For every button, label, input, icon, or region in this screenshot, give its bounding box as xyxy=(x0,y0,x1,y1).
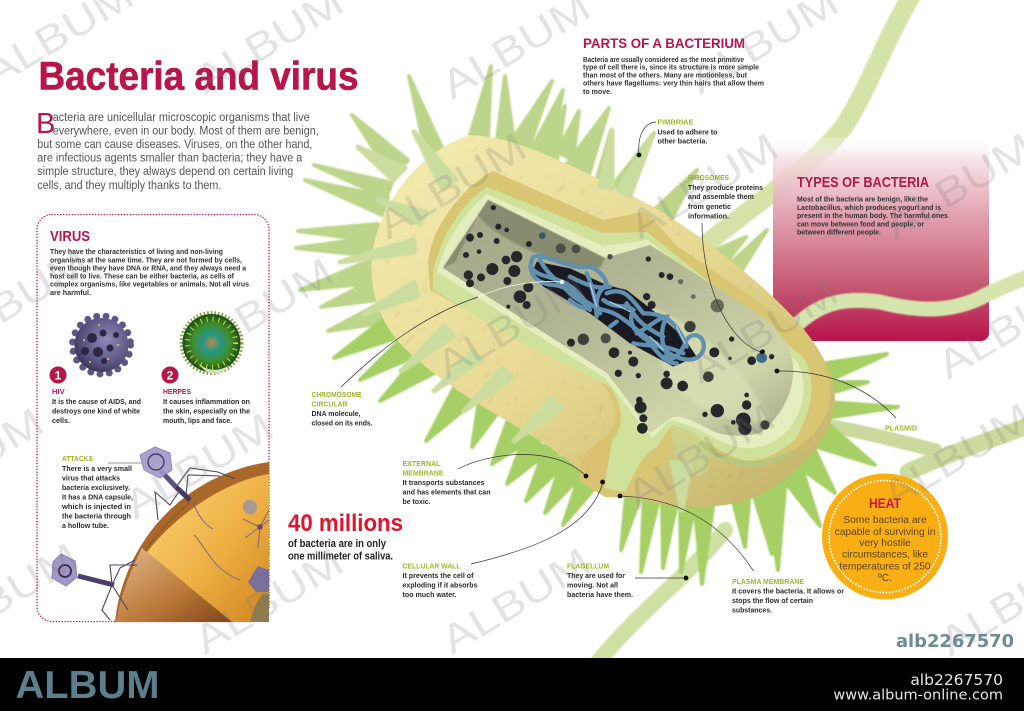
outer yellow surface xyxy=(371,135,835,507)
watermarks: ALBUM xyxy=(434,0,598,108)
text: HIV xyxy=(52,387,141,425)
fimbriae: saturated green lower spikes xyxy=(334,308,898,584)
callout: heat: capable of surviving in xyxy=(835,527,935,538)
label: external membrane: be toxic. xyxy=(402,497,430,506)
text: virus description: organisms at the same time. They are not formed by cells, xyxy=(50,256,242,264)
callout: heat: very hostile xyxy=(859,538,911,549)
label: ribosomes: information. xyxy=(688,212,729,220)
footer url: www.album-online.com xyxy=(833,688,1003,704)
label: fimbriae xyxy=(637,118,718,157)
text: herpes: the skin, especially on the xyxy=(163,406,250,416)
drop cap: B xyxy=(36,108,55,140)
sphere cut interior xyxy=(147,474,269,622)
footer logo: ALBUM xyxy=(16,664,159,707)
text: HIV: destroys one kind of white xyxy=(52,406,140,416)
text: attacks: It has a DNA capsule, xyxy=(62,492,133,502)
callout: heat: Some bacteria are xyxy=(843,515,927,526)
intro text block: are infectious agents smaller than bacteria; they have a xyxy=(37,150,302,164)
watermarks: ALBUM xyxy=(682,270,846,393)
label: fimbriae: FIMBRIAE xyxy=(658,118,694,126)
badge 1 xyxy=(50,366,66,384)
text: virus description xyxy=(50,247,249,297)
intro text block: but some can cause diseases. Viruses, on the other hand, xyxy=(37,137,312,151)
text: herpes xyxy=(163,387,250,425)
badge 2: 2 xyxy=(167,368,174,382)
label: external membrane: MEMBRANE xyxy=(402,468,444,478)
text: attacks: a hollow tube. xyxy=(62,521,109,530)
flagella: long green tails xyxy=(598,276,1024,662)
text: attacks xyxy=(61,454,133,530)
text: attacks: There is a very small xyxy=(62,464,132,473)
label: chromosome xyxy=(312,280,564,428)
label: cellular wall xyxy=(402,480,605,599)
text: virus description: even though they have DNA or RNA, and they always need a xyxy=(50,264,247,272)
cell interior xyxy=(443,200,793,436)
callout: heat xyxy=(822,474,948,600)
text: types of bacteria description: Lactobacillus, which produces yogurt and is xyxy=(797,203,941,212)
text block: parts of a bacterium: Bacteria are usually considered as the most primitive xyxy=(583,55,744,64)
footer bar xyxy=(0,658,1024,711)
callout: heat: HEAT xyxy=(869,495,901,511)
callout: 40 millions: of bacteria are in only xyxy=(288,538,387,550)
watermarks: ALBUM xyxy=(622,125,786,248)
chromosome: blue DNA tangle xyxy=(530,256,704,367)
label: chromosome: CIRCULAR xyxy=(312,400,348,408)
text: virus description: host cell to live. These can be either bacteria, as cells of xyxy=(50,272,234,280)
label: plasmid: PLASMID xyxy=(885,424,917,432)
label: cellular wall: CELLULAR WALL xyxy=(402,562,461,570)
icon: HIV virus xyxy=(72,316,130,374)
tab: cut wall end xyxy=(584,440,612,490)
panel: virus xyxy=(37,214,269,622)
label: flagellum xyxy=(567,562,688,599)
label: fimbriae: Used to adhere to xyxy=(658,128,718,136)
label: plasma membrane: It covers the bacteria. It allows or xyxy=(732,586,844,596)
text: virus description: are harmful. xyxy=(50,288,91,297)
text: herpes: It causes inflammation on xyxy=(163,397,250,406)
callout: 40 millions: one millimeter of saliva. xyxy=(288,550,393,562)
text block: parts of a bacterium: to move. xyxy=(583,87,612,96)
watermarks: ALBUM xyxy=(434,540,598,663)
callout: 40 millions: 40 millions xyxy=(288,510,403,537)
text block: parts of a bacterium xyxy=(583,35,764,96)
text: types of bacteria description: between different people. xyxy=(797,228,881,236)
label: ribosomes: They produce proteins xyxy=(688,183,763,192)
label: cellular wall: exploding if it absorbs xyxy=(402,580,478,590)
ribosome near plasmid xyxy=(757,353,767,363)
label: flagellum: bacteria have them. xyxy=(567,590,633,599)
label: external membrane: and has elements that can xyxy=(402,488,491,496)
text: attacks: bacteria exclusively. xyxy=(62,483,130,492)
cell granules xyxy=(463,205,774,435)
icon: herpes virus xyxy=(182,313,242,374)
intro text block: acteria are unicellular microscopic organisms that live xyxy=(53,110,310,124)
callout: 40 millions xyxy=(288,510,403,562)
text block: parts of a bacterium: others have flagellums: very thin hairs that allow them xyxy=(583,78,764,88)
text: virus description: complex organisms, like vegetables or animals. Not all virus xyxy=(50,280,249,288)
image code: alb2267570 xyxy=(896,631,1014,652)
text: HIV: HIV xyxy=(52,387,66,396)
callout: heat: ºC. xyxy=(878,573,892,584)
text: HIV: cells. xyxy=(52,416,70,425)
label: ribosomes xyxy=(688,173,764,354)
callout: heat: temperatures of 250 xyxy=(839,562,931,572)
label: chromosome: CHROMOSOME xyxy=(312,390,362,399)
text: herpes: HERPES xyxy=(163,387,191,396)
label: flagellum: moving. Not all xyxy=(567,580,618,590)
label: plasmid xyxy=(775,369,917,432)
text: HIV: It is the cause of AIDS, and xyxy=(52,397,141,406)
text block: parts of a bacterium: than most of the others. Many are motionless, but xyxy=(583,70,748,80)
label: ribosomes: and assemble them xyxy=(688,192,754,201)
intro text block xyxy=(36,108,319,192)
footer image id: alb2267570 xyxy=(910,671,1003,689)
badge 2 xyxy=(162,366,178,384)
text block: parts of a bacterium: type of cell there is, since its structure is more simple xyxy=(583,62,759,72)
watermarks: ALBUM xyxy=(187,540,351,663)
interior back wall xyxy=(443,200,605,268)
watermarks: ALBUM xyxy=(177,250,341,373)
bacterium body xyxy=(371,135,835,507)
label: external membrane: It transports substances xyxy=(402,478,484,487)
label: cellular wall: It prevents the cell of xyxy=(402,571,474,580)
heading: types of bacteria: TYPES OF BACTERIA xyxy=(797,174,929,191)
watermarks: ALBUM xyxy=(370,125,534,248)
watermarks: ALBUM xyxy=(117,405,281,528)
text: attacks: which is injected in xyxy=(61,502,131,511)
badge 1: 1 xyxy=(55,368,62,382)
sphere outer surface xyxy=(116,548,232,622)
label: ribosomes: from genetic xyxy=(688,202,731,211)
text block: parts of a bacterium: PARTS OF A BACTERIUM xyxy=(583,35,745,51)
intro text block: cells, and they multiply thanks to them. xyxy=(37,178,221,192)
label: plasma membrane: stops the flow of certain xyxy=(732,596,813,605)
intro text block: everywhere, even in our body. Most of them are benign, xyxy=(53,124,319,138)
label: flagellum: FLAGELLUM xyxy=(567,562,609,570)
watermarks: ALBUM xyxy=(429,265,593,388)
label: cellular wall: too much water. xyxy=(402,590,456,599)
label: plasma membrane: PLASMA MEMBRANE xyxy=(732,577,804,586)
text: types of bacteria description xyxy=(797,194,948,236)
phage: upper xyxy=(140,447,235,520)
text: attacks: the bacteria through xyxy=(62,512,131,520)
light green membrane xyxy=(433,187,811,492)
label: chromosome: closed on its ends. xyxy=(312,418,372,428)
phage: right xyxy=(248,566,269,622)
label: external membrane: EXTERNAL xyxy=(402,459,441,468)
fimbriae: pale green upper spikes xyxy=(296,66,767,331)
text: attacks: virus that attacks xyxy=(62,474,120,482)
watermarks: ALBUM xyxy=(619,395,783,518)
title: Bacteria and virus xyxy=(38,54,358,98)
label: fimbriae: other bacteria. xyxy=(658,137,708,146)
label: ribosomes: RIBOSOMES xyxy=(688,173,729,182)
label: external membrane xyxy=(402,454,588,506)
fimbriae: front spikes over the body xyxy=(340,130,690,510)
text: types of bacteria description: Most of the bacteria are benign, like the xyxy=(797,194,928,204)
heading: virus: VIRUS xyxy=(50,228,90,245)
illustration: bacterial cell under attack xyxy=(52,447,269,622)
label: plasma membrane: substances. xyxy=(732,606,772,614)
text: attacks: ATTACKS xyxy=(62,454,93,463)
inner organelles xyxy=(193,501,269,580)
callout: heat: circumstances, like xyxy=(842,550,928,560)
text: types of bacteria description: present in the human body. The harmful ones xyxy=(797,211,948,220)
label: flagellum: They are used for xyxy=(567,571,625,580)
text: virus description: They have the characteristics of living and non-living xyxy=(50,247,223,256)
text: herpes: mouth, lips and face. xyxy=(163,416,232,425)
tan rim of the cut xyxy=(428,171,830,498)
panel: types of bacteria xyxy=(773,137,989,341)
watermarks: ALBUM xyxy=(875,395,1024,518)
intro text block: simple structure, they always depend on certain living xyxy=(37,164,293,178)
label: plasma membrane xyxy=(618,494,844,614)
phage: lower xyxy=(52,554,137,620)
label: chromosome: DNA molecule, xyxy=(312,409,360,418)
flagellum: upper right tail behind the panel xyxy=(705,0,912,245)
watermarks: ALBUM xyxy=(877,125,1024,248)
text: types of bacteria description: can move between food and people, or xyxy=(797,220,924,228)
